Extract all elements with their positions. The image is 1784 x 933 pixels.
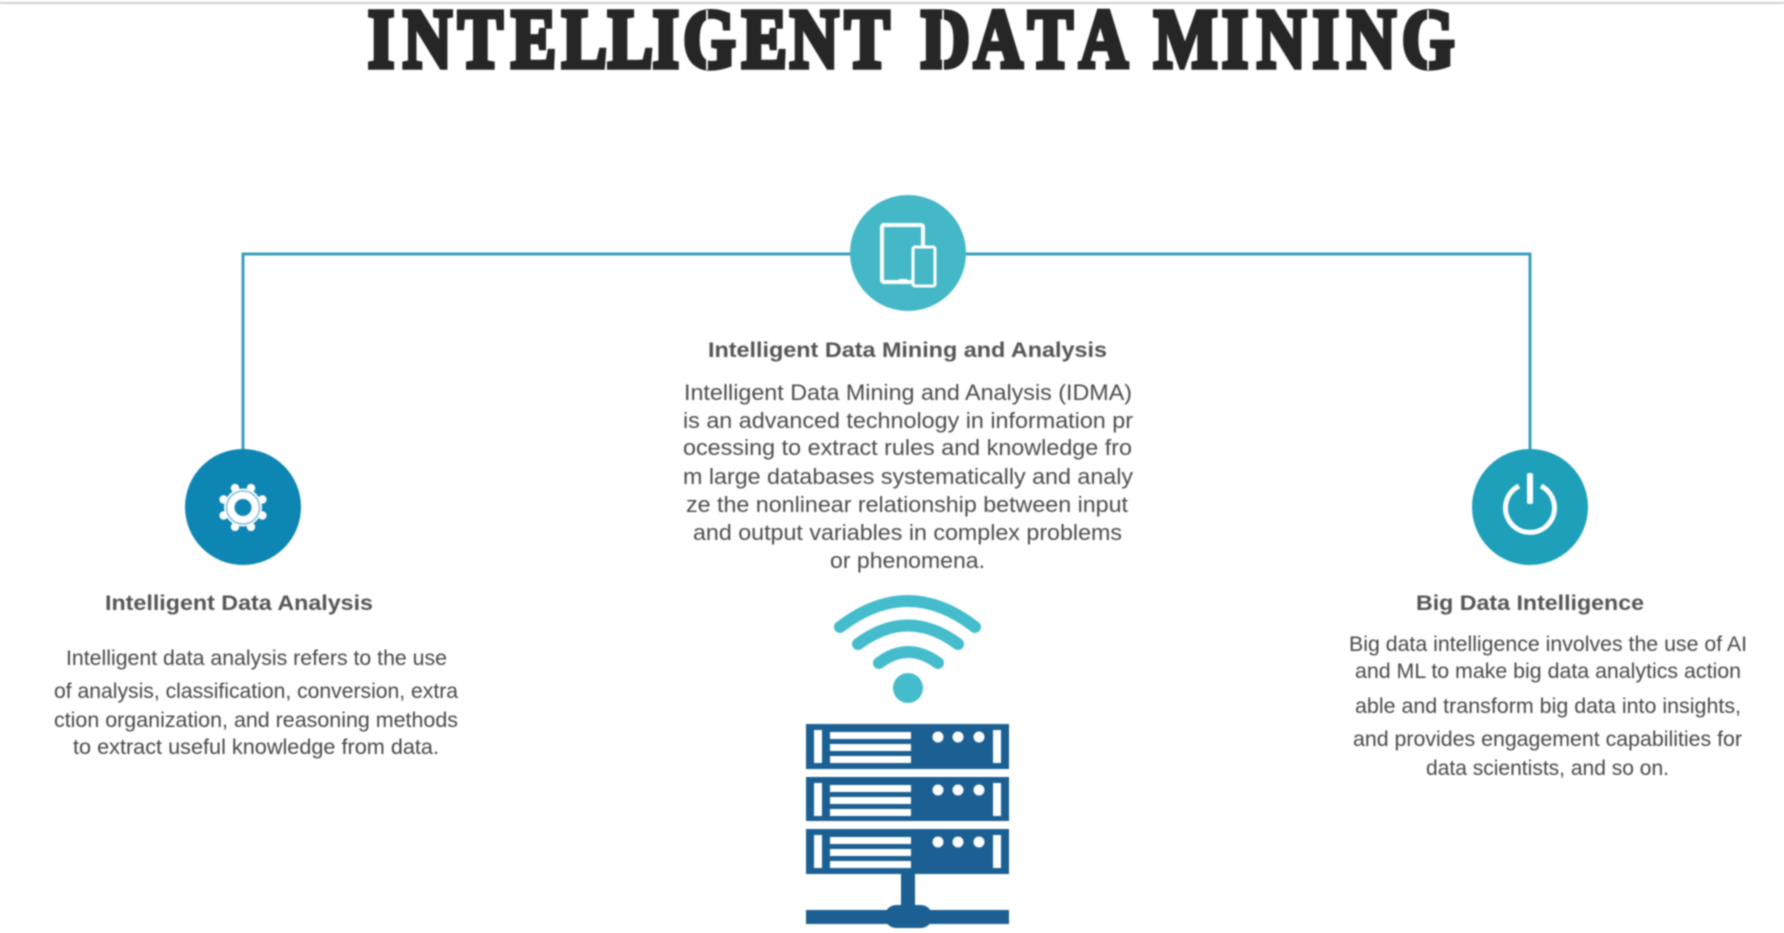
icon: power button bbox=[1472, 449, 1588, 565]
text block: Intelligent data analysis refers to the use bbox=[66, 646, 447, 670]
server unit 2 bbox=[806, 777, 1009, 821]
heading: Intelligent Data Mining and Analysis bbox=[708, 338, 1107, 362]
connector line bbox=[243, 254, 1530, 450]
text block: Intelligent Data Mining and Analysis (IDMA) bbox=[684, 380, 1132, 405]
text block: m large databases systematically and analy bbox=[683, 464, 1134, 489]
panel: big data intelligence bbox=[1349, 449, 1747, 780]
text block: is an advanced technology in information pr bbox=[683, 408, 1134, 433]
server unit 1 bbox=[806, 724, 1009, 769]
text block: ction organization, and reasoning methods bbox=[54, 708, 458, 732]
heading: Intelligent Data Analysis bbox=[105, 591, 373, 615]
panel: intelligent data mining and analysis bbox=[683, 195, 1134, 573]
server unit 3 bbox=[806, 829, 1009, 874]
icon: server rack bbox=[806, 724, 1009, 928]
text block bbox=[683, 380, 1134, 573]
text block: ze the nonlinear relationship between input bbox=[686, 492, 1129, 517]
icon: tablet and phone bbox=[850, 195, 966, 311]
text block: data scientists, and so on. bbox=[1426, 756, 1669, 780]
heading: Big Data Intelligence bbox=[1416, 591, 1644, 615]
text block: ocessing to extract rules and knowledge fro bbox=[683, 435, 1132, 460]
text block: or phenomena. bbox=[830, 548, 985, 573]
text block bbox=[1349, 632, 1747, 780]
text block: able and transform big data into insights, bbox=[1355, 694, 1741, 718]
text block: and ML to make big data analytics action bbox=[1355, 659, 1741, 683]
icon: wifi signal bbox=[840, 601, 975, 703]
text block: of analysis, classification, conversion, extra bbox=[54, 679, 458, 703]
text block: Big data intelligence involves the use of AI bbox=[1349, 632, 1747, 656]
text block bbox=[54, 646, 458, 759]
text block: and provides engagement capabilities for bbox=[1353, 727, 1742, 751]
panel: intelligent data analysis bbox=[54, 449, 458, 759]
text block: and output variables in complex problems bbox=[693, 520, 1122, 545]
icon: gear bbox=[185, 449, 301, 565]
text block: to extract useful knowledge from data. bbox=[73, 735, 439, 759]
network base bbox=[806, 874, 1009, 928]
